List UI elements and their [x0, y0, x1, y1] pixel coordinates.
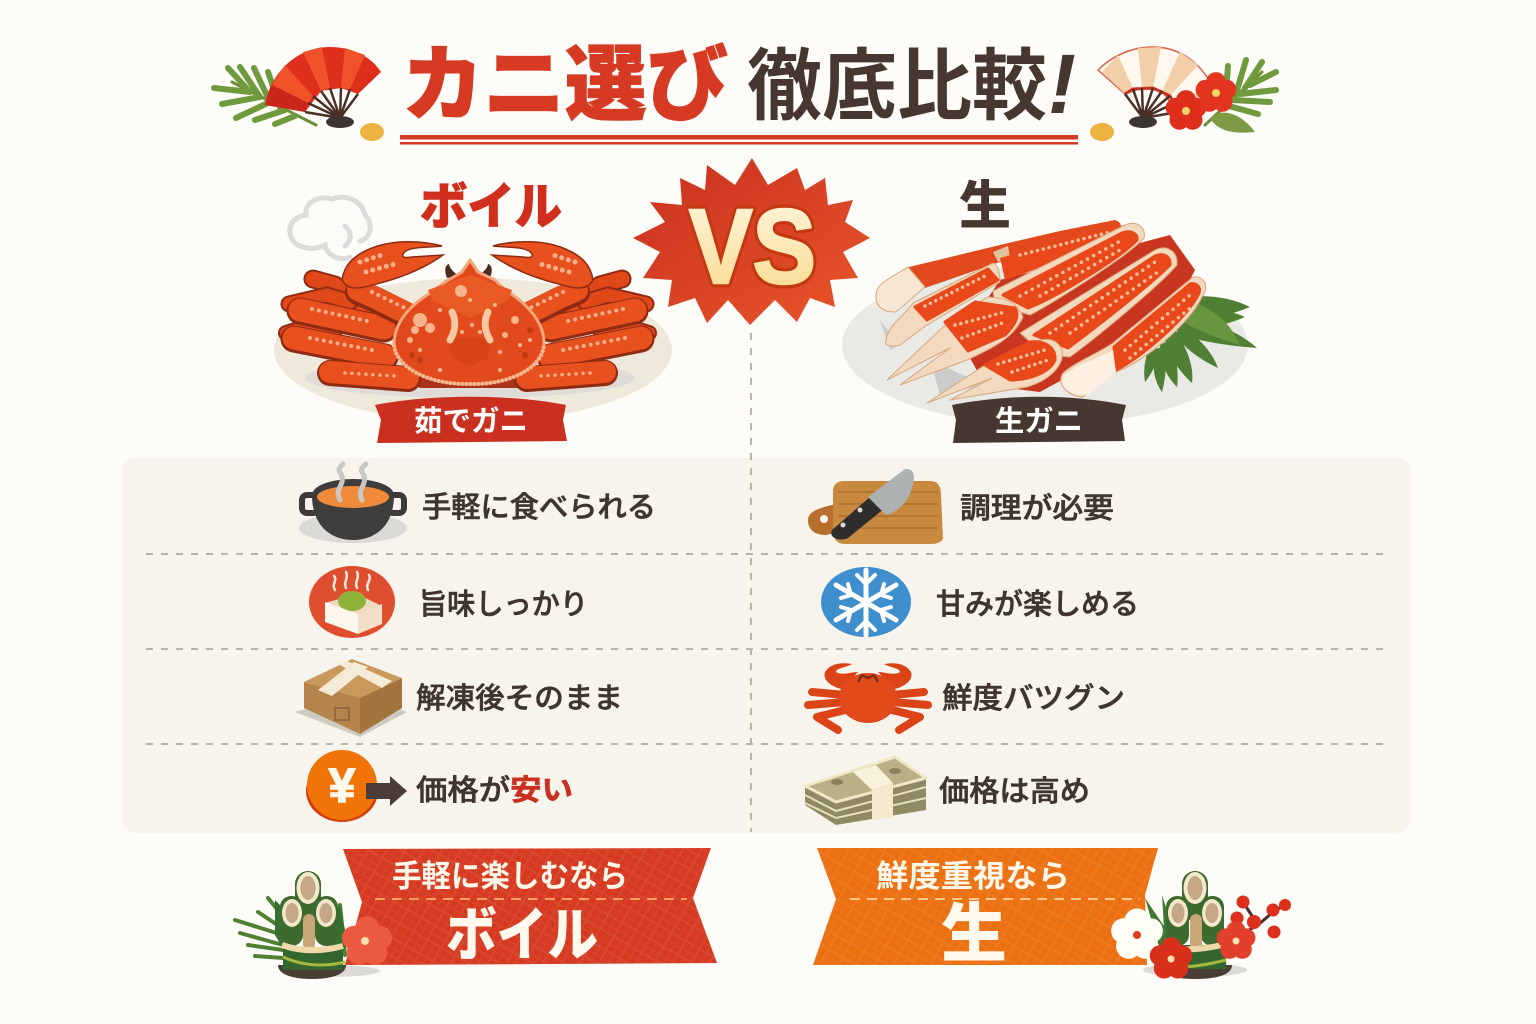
- illustration: raw crab legs: [842, 220, 1257, 425]
- heading: raw: 生: [959, 178, 1011, 236]
- icon: yen coin with arrow: ¥: [329, 760, 356, 813]
- icon: steam cloud: [290, 197, 370, 259]
- icon: hot pot: [299, 464, 407, 543]
- text: easy to eat: 手軽に食べられる: [422, 491, 656, 524]
- text: great freshness: 鮮度バツグン: [942, 682, 1125, 715]
- back leg: [876, 220, 1121, 312]
- title underline: [400, 135, 1078, 144]
- title: [402, 37, 1076, 131]
- heading: boil: ボイル: [420, 179, 562, 235]
- icon: snowflake: [821, 567, 911, 637]
- icon: left pine sprig: [214, 67, 316, 125]
- ribbon: casual choice: ボイル: [446, 903, 598, 968]
- icon: left plum flower: [342, 916, 392, 965]
- icon: red plum flower upper: [1217, 921, 1255, 959]
- icon: green leaf right: [1210, 113, 1255, 133]
- text: rich umami: 旨味しっかり: [419, 588, 588, 621]
- leaves: bamboo: [1144, 296, 1257, 392]
- icon: stack of banknotes: [805, 757, 926, 825]
- icon: left kadomatsu: [235, 871, 380, 979]
- third leg: [993, 223, 1144, 315]
- ribbon: freshness choice: 生: [941, 898, 1007, 970]
- banner: raw crab: [952, 397, 1126, 443]
- text: enjoy sweetness: 甘みが楽しめる: [936, 588, 1139, 621]
- VS starburst: VS: [689, 188, 816, 306]
- VS starburst: VS: [689, 188, 816, 306]
- icon: small crab: [808, 663, 928, 730]
- ribbon: freshness choice: [813, 848, 1158, 970]
- text: higher price: 価格は高め: [939, 775, 1090, 808]
- icon: camellia flowers: [1166, 72, 1236, 130]
- banner: boiled crab: [375, 397, 567, 443]
- underlay: dark flesh: [960, 235, 1195, 392]
- icon: cutting board and knife: [808, 469, 943, 544]
- icon: red folding fan: [265, 47, 381, 128]
- icon: red plum flower lower: [1150, 937, 1192, 979]
- ribbon: freshness choice: 鮮度重視なら: [876, 859, 1070, 894]
- right leg: [1061, 277, 1206, 397]
- ribbon: casual choice: [343, 848, 717, 968]
- icon: cardboard box: [295, 659, 407, 737]
- icon: crab miso box: [309, 566, 395, 638]
- icon: right kadomatsu: [1143, 871, 1247, 979]
- claw lower: [927, 339, 1062, 403]
- banner: boiled crab: 茹でガニ: [414, 405, 528, 438]
- comparison panel: [122, 458, 1411, 833]
- title: 徹底比較: [747, 42, 1047, 130]
- VS starburst: [633, 158, 870, 325]
- icon: cream folding fan: [1098, 47, 1218, 128]
- text: low price: 価格が安い: [416, 774, 573, 807]
- icon: plum branch: [1230, 896, 1291, 938]
- second leg: [886, 225, 1126, 346]
- claw upper: [887, 297, 1023, 385]
- icon: yen coin with arrow: [306, 750, 407, 822]
- title: カニ選び: [402, 40, 728, 131]
- banner: raw crab: 生ガニ: [995, 405, 1083, 438]
- text: ready after thawing: 解凍後そのまま: [416, 682, 623, 715]
- row separators and centre line: [146, 333, 1390, 832]
- text: cooking needed: 調理が必要: [960, 492, 1114, 525]
- icon: gold coin right: [1090, 123, 1114, 141]
- illustration: boiled crab: [274, 242, 672, 422]
- icon: right pine sprig: [1205, 60, 1276, 125]
- icon: gold coin left: [360, 123, 384, 141]
- icon: white plum flower: [1111, 908, 1163, 959]
- title: !: [1048, 37, 1076, 131]
- fourth leg: [1020, 248, 1177, 357]
- ribbon: casual choice: 手軽に楽しむなら: [392, 859, 628, 894]
